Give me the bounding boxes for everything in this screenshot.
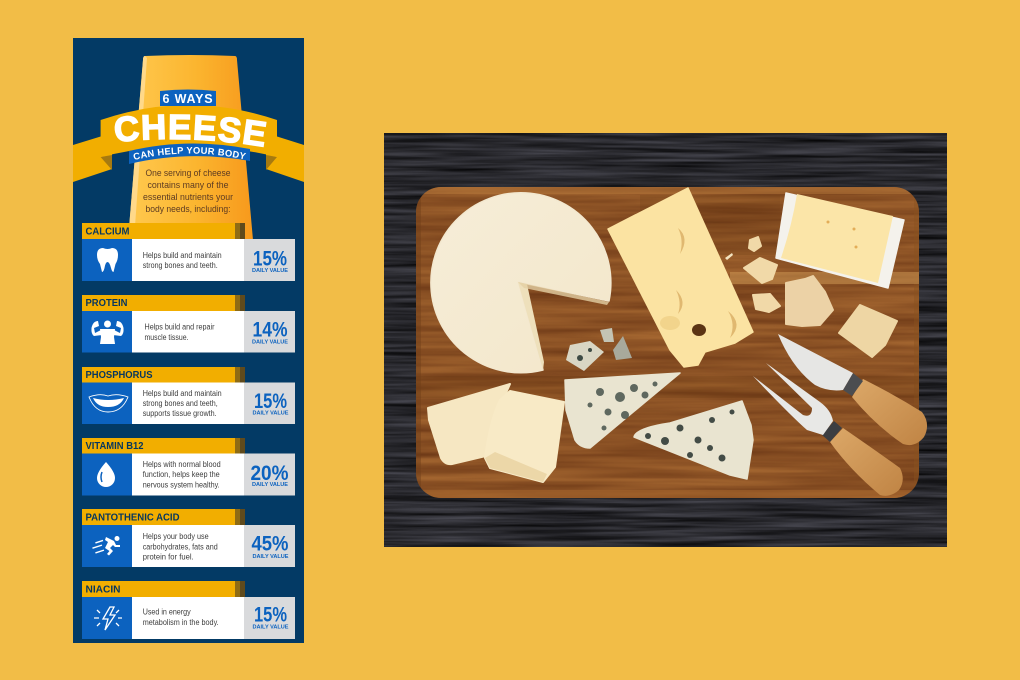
row: pantothenic acid: Helps your body use [143,532,209,541]
cheese: wheel [431,193,611,373]
icon: muscle torso [91,320,124,344]
row: calcium: DAILY VALUE [252,268,288,274]
row: calcium: 15% [253,248,287,270]
cheese: blue wedges [565,373,753,479]
row: calcium: strong bones and teeth. [143,261,218,270]
row: niacin: NIACIN [86,584,120,596]
icon: energy bolt [94,607,122,630]
icon: cheese wedge [128,55,253,240]
row: pantothenic acid: DAILY VALUE [252,554,289,560]
row: calcium [82,223,295,281]
row: protein: PROTEIN [86,298,128,309]
row: phosphorus: 15% [254,390,287,413]
dark wood table [384,133,947,547]
ribbon banner [73,105,304,182]
cheese: semi-soft slices [428,384,564,482]
cheese: swiss wedge [608,188,753,367]
row: niacin [82,581,295,639]
row: protein: DAILY VALUE [252,340,288,346]
row: calcium: CALCIUM [86,226,130,238]
row: pantothenic acid: 45% [252,533,289,556]
row: vitamin b12: DAILY VALUE [252,482,288,488]
icon: water drop [97,462,115,487]
row: niacin: DAILY VALUE [252,624,289,630]
row: vitamin b12: Helps with normal blood [143,460,221,469]
row: phosphorus [82,367,295,424]
cheese: blue crumbles [566,328,632,371]
cheese fork [753,363,903,496]
row: pantothenic acid: carbohydrates, fats and [143,542,218,552]
row: phosphorus: supports tissue growth. [143,409,217,418]
panel: infographic [73,38,304,643]
row: pantothenic acid: PANTOTHENIC ACID [86,512,180,524]
row: calcium: Helps build and maintain [143,251,222,260]
row: protein: Helps build and repair [144,322,215,332]
row: phosphorus: strong bones and teeth, [143,399,218,408]
intro text: One serving of cheese [146,167,230,178]
row: vitamin b12: 20% [250,462,289,485]
panel: cheese board photo [384,133,947,547]
icon: tooth [97,248,118,272]
wooden board [416,187,919,498]
row: vitamin b12: VITAMIN B12 [86,441,144,452]
icon: smile [89,395,128,412]
badge: 6 ways: 6 WAYS [163,92,213,106]
title: cheese: CHEESE [114,114,267,148]
intro text: body needs, including: [146,203,230,214]
row: vitamin b12 [82,438,295,496]
row: phosphorus: PHOSPHORUS [86,370,153,381]
row: vitamin b12: function, helps keep the [143,470,220,479]
icon: runner [92,536,120,556]
row: niacin: Used in energy [143,608,191,616]
knife [778,334,927,445]
intro text [143,167,233,214]
row: niacin: 15% [254,604,287,627]
row: pantothenic acid [82,509,295,567]
cheese: brie [776,193,904,288]
cheese: crumbles [725,237,897,357]
row: protein: muscle tissue. [144,333,188,342]
intro text: contains many of the [148,179,228,190]
row: pantothenic acid: protein for fuel. [143,552,194,562]
row: protein: 14% [252,319,288,342]
row: niacin: metabolism in the body. [143,618,219,627]
intro text: essential nutrients your [143,191,233,202]
row: vitamin b12: nervous system healthy. [143,480,220,490]
badge: can help your body: CAN HELP YOUR BODY [134,147,246,160]
row: protein [82,295,295,352]
row: phosphorus: DAILY VALUE [252,410,289,416]
row: phosphorus: Helps build and maintain [143,389,222,398]
